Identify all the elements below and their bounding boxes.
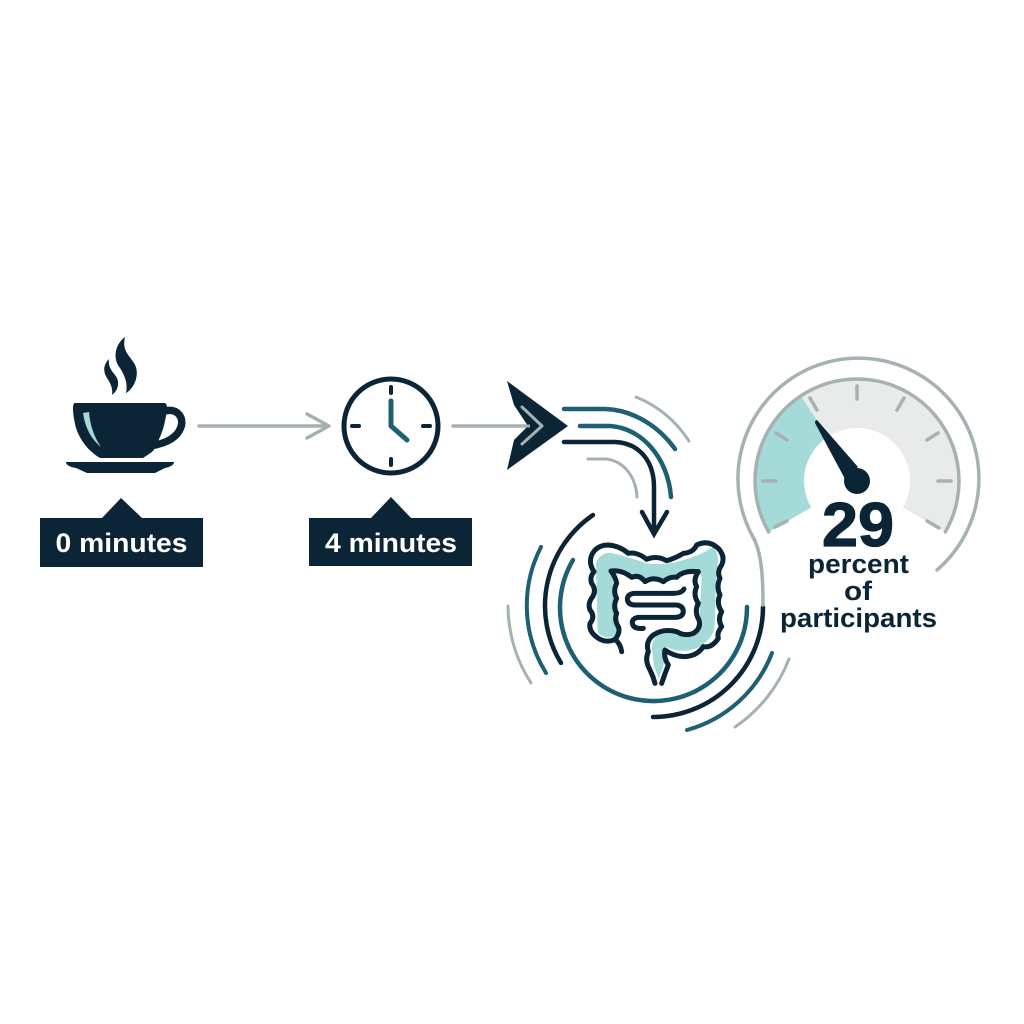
outer gauge ring xyxy=(738,358,979,605)
cup highlight xyxy=(83,412,101,447)
gauge ticks xyxy=(763,386,951,528)
label: 0 minutes: 0 minutes xyxy=(56,528,188,558)
arrow: cup to clock xyxy=(199,414,329,438)
gauge teal segment xyxy=(755,396,828,532)
caption: percent of participants xyxy=(780,549,937,633)
caption: percent of participants: of xyxy=(844,576,873,606)
curved motion lines xyxy=(564,397,689,534)
vibration rings around intestine xyxy=(508,515,789,730)
gauge inner rim xyxy=(755,379,959,532)
intestine outline xyxy=(589,543,723,683)
icon: clock xyxy=(344,379,438,473)
clock hands xyxy=(391,401,407,440)
cup body xyxy=(73,403,167,458)
saucer xyxy=(66,462,174,473)
value: 29: 29 xyxy=(822,491,894,560)
label: 0 minutes xyxy=(40,498,203,567)
gauge: 29 percent xyxy=(738,358,979,633)
arrow: clock to arrowhead xyxy=(453,381,568,470)
steam xyxy=(104,337,137,395)
caption: percent of participants: percent xyxy=(808,549,909,579)
dark arrowhead xyxy=(507,381,568,470)
cup handle xyxy=(150,410,182,446)
gauge remaining band xyxy=(801,379,959,532)
label: 4 minutes xyxy=(309,497,472,566)
gauge needle xyxy=(815,420,870,494)
label: 4 minutes: 4 minutes xyxy=(325,528,457,558)
intestine fill xyxy=(596,547,718,678)
icon: coffee cup xyxy=(66,337,182,473)
dark arrow into intestine xyxy=(564,442,667,534)
caption: percent of participants: participants xyxy=(780,603,937,633)
clock tick marks xyxy=(352,387,430,465)
icon: intestine xyxy=(589,543,723,683)
